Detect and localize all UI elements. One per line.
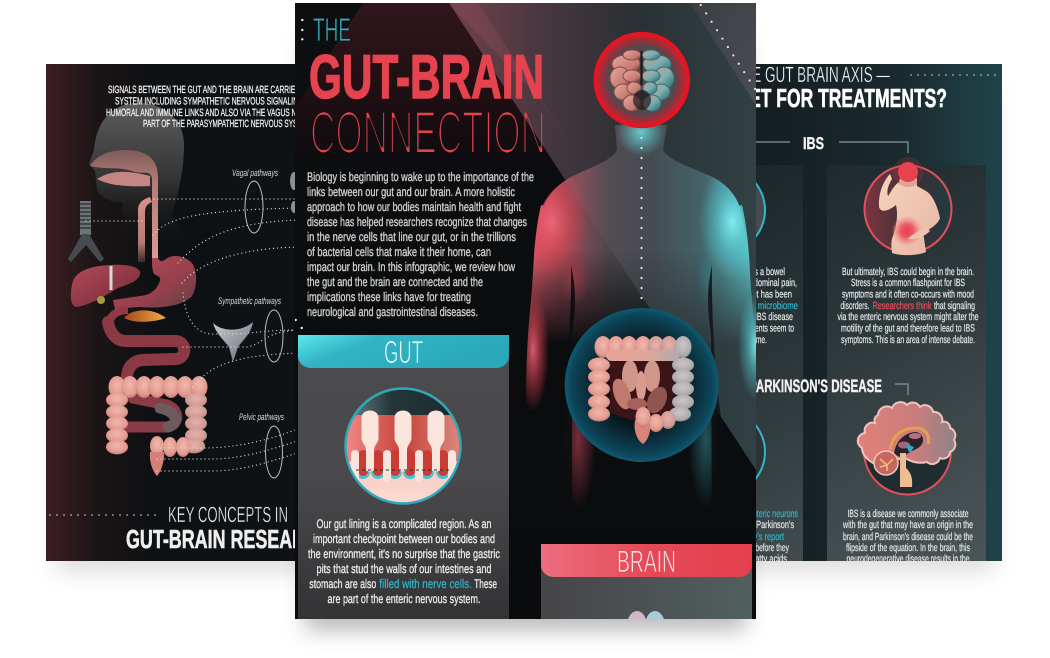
intro text: signals: PART OF THE PARASYMPATHETIC NERVOUS SYSTEM bbox=[143, 118, 311, 130]
gut paragraph: filled with nerve cells. bbox=[379, 577, 472, 591]
small intestine folds bbox=[609, 358, 674, 421]
intro text: signals: SIGNALS BETWEEN THE GUT AND THE BRAIN ARE CARRIED bbox=[108, 84, 300, 96]
spine dots bbox=[640, 138, 643, 300]
heading dots bbox=[911, 74, 998, 76]
footer heading: KEY CONCEPTS IN bbox=[168, 502, 288, 527]
intro text: signals: SYSTEM INCLUDING SYMPATHETIC NERVOUS SIGNALING, bbox=[115, 96, 305, 108]
footer heading bbox=[126, 506, 295, 548]
arm gaps bbox=[562, 265, 575, 498]
gut banner bbox=[298, 335, 509, 368]
head silhouette bbox=[89, 103, 184, 216]
text: IBS left column (partly hidden): but it has been bbox=[742, 288, 792, 300]
brain banner bbox=[541, 544, 752, 577]
text: IBS right column: symptoms. This is an area of intense debate. bbox=[841, 334, 975, 346]
text: IBS left column (partly hidden): patients seem to bbox=[744, 322, 794, 334]
icon: gut lining bbox=[344, 388, 462, 505]
icon: colon bbox=[106, 376, 208, 476]
title: CONNECTION bbox=[310, 99, 546, 166]
heading bbox=[756, 66, 946, 108]
icon: Parkinson's brain bbox=[858, 402, 955, 494]
text: Parkinson's right column: flipside of the equation. In the brain, this bbox=[846, 542, 970, 554]
text: Parkinson's right column: IBS is a disease we commonly associate bbox=[848, 508, 969, 520]
title dots bbox=[294, 19, 303, 329]
text: IBS left column (partly hidden): gut microbiome bbox=[745, 300, 798, 312]
text: IBS right column: symptoms and it often co-occurs with mood bbox=[842, 288, 974, 300]
pathway labels: Sympathetic pathways bbox=[218, 296, 281, 307]
intro paragraph: links between our gut and our brain. A more holistic bbox=[307, 185, 515, 199]
text: IBS right column: Stress is a common flashpoint for IBS bbox=[851, 277, 965, 289]
icon: small intestine bbox=[108, 322, 184, 427]
text: IBS left column (partly hidden): years before they bbox=[737, 542, 789, 554]
text: IBS left column (partly hidden): biome. bbox=[747, 334, 767, 346]
diagonal light overlay bbox=[449, 3, 756, 470]
intro paragraph bbox=[307, 170, 534, 319]
panel: key concepts poster (left) bbox=[46, 64, 295, 561]
brain lobes bbox=[610, 50, 641, 111]
text: IBS left column (partly hidden): today's report bbox=[739, 531, 784, 543]
gut paragraph: are part of the enteric nervous system. bbox=[328, 592, 480, 606]
text: IBS left column (partly hidden) bbox=[756, 267, 798, 561]
text: IBS right column: via the enteric nervous system might alter the bbox=[838, 311, 979, 323]
text: IBS left column (partly hidden): with abdominal pain, bbox=[730, 277, 797, 289]
icon: brain top bbox=[627, 611, 665, 641]
title bbox=[309, 11, 546, 166]
intro text: signals: HUMORAL AND IMMUNE LINKS AND ALSO VIA THE VAGUS NERVE, bbox=[106, 107, 316, 119]
footer heading: GUT-BRAIN RESEARCH bbox=[126, 524, 331, 554]
digestive tract upper bbox=[90, 150, 158, 262]
text: Parkinson's right column bbox=[842, 508, 973, 565]
title: GUT-BRAIN bbox=[309, 43, 544, 112]
pathway labels bbox=[218, 168, 284, 423]
section label: Parkinson's disease: PARKINSON'S DISEASE bbox=[749, 376, 882, 396]
text: IBS right column: motility of the gut and therefore lead to IBS bbox=[841, 322, 975, 334]
gut paragraph: Our gut lining is a complicated region. As an bbox=[316, 517, 492, 531]
large intestine bbox=[588, 336, 694, 444]
icon: trachea bbox=[68, 201, 104, 262]
heading: THE GUT BRAIN AXIS — bbox=[734, 62, 890, 87]
text: IBS left column (partly hidden): fatty acids bbox=[753, 553, 787, 565]
text: IBS right column: disorders. bbox=[840, 300, 870, 312]
pathway labels: Vagal pathways bbox=[232, 168, 278, 179]
text: Parkinson's right column: brain, and Parkinson's disease could be the bbox=[843, 531, 973, 543]
intro paragraph: in the nerve cells that line our gut, or in the trillions bbox=[307, 230, 516, 244]
IBS connector bbox=[750, 142, 908, 153]
gut paragraph: pits that stud the walls of our intestines and bbox=[316, 562, 492, 576]
text: IBS left column (partly hidden): the enteric neurons bbox=[737, 508, 798, 520]
intro text: signals bbox=[106, 86, 295, 128]
intro paragraph: neurological and gastrointestinal diseases. bbox=[307, 305, 478, 319]
pathway rings bbox=[245, 181, 283, 478]
intro paragraph: impact our brain. In this infographic, we review how bbox=[307, 260, 516, 274]
gray organs at fold bbox=[290, 172, 295, 213]
gut heading: GUT bbox=[384, 334, 423, 370]
pathway labels: Pelvic pathways bbox=[239, 412, 284, 423]
brain heading: BRAIN bbox=[617, 544, 676, 579]
icon: colon in blue ring bbox=[565, 308, 719, 462]
gut paragraph: These bbox=[474, 577, 497, 591]
text: IBS right column: Researchers think bbox=[872, 300, 932, 312]
intro paragraph: of bacterial cells that make it their home, can bbox=[307, 245, 491, 259]
title: THE bbox=[313, 11, 351, 48]
text: Parkinson's right column: with the gut that may have an origin in the bbox=[842, 519, 973, 531]
gut paragraph: important checkpoint between our bodies and bbox=[313, 532, 495, 546]
icon: nerve ganglion bbox=[213, 322, 253, 362]
intro paragraph: implications these links have for treating bbox=[307, 290, 471, 304]
panel: brain bbox=[541, 544, 752, 641]
gut paragraph: stomach are also bbox=[309, 577, 376, 591]
footer dots bbox=[50, 514, 160, 516]
text: IBS right column bbox=[838, 266, 979, 346]
Parkinson connector bbox=[895, 384, 908, 395]
intro paragraph: approach to how our bodies maintain health and fight bbox=[307, 200, 521, 214]
icon: human body bbox=[526, 124, 756, 504]
text: IBS left column (partly hidden): IBS is a bowel bbox=[739, 266, 785, 278]
text: Parkinson's right column: neurodegenerative disease results in the bbox=[846, 553, 970, 565]
background facets bbox=[295, 3, 756, 470]
panel: main poster (centre) bbox=[294, 3, 774, 641]
icon: brain in red ring bbox=[595, 33, 689, 127]
icon: liver bbox=[71, 265, 140, 307]
icon: stomach bbox=[113, 256, 196, 309]
panel: gut bbox=[298, 334, 509, 619]
gut paragraph: the environment, it's no surprise that the gastric bbox=[308, 547, 500, 561]
icon: IBS person bbox=[864, 157, 952, 255]
text: IBS right column: But ultimately, IBS could begin in the brain. bbox=[842, 266, 974, 278]
left column icon circles bbox=[756, 182, 766, 480]
panel: treatments poster (right) bbox=[756, 64, 1002, 561]
section label: IBS: IBS bbox=[803, 134, 824, 153]
text: IBS right column: that signaling bbox=[934, 300, 975, 312]
icon: pancreas and duodenum bbox=[107, 306, 166, 322]
intro paragraph: the gut and the brain are connected and the bbox=[307, 275, 483, 289]
gut paragraph bbox=[308, 517, 500, 606]
diagonal dots bbox=[701, 5, 759, 95]
intro paragraph: Biology is beginning to wake up to the importance of the bbox=[307, 170, 534, 184]
text columns bbox=[745, 165, 986, 561]
text: IBS left column (partly hidden): of Parkinson's bbox=[748, 519, 794, 531]
intro paragraph: disease has helped researchers recognize that changes bbox=[307, 215, 527, 229]
dotted nerve pathways bbox=[86, 199, 300, 471]
text: IBS left column (partly hidden): of IBS disease bbox=[747, 311, 793, 323]
